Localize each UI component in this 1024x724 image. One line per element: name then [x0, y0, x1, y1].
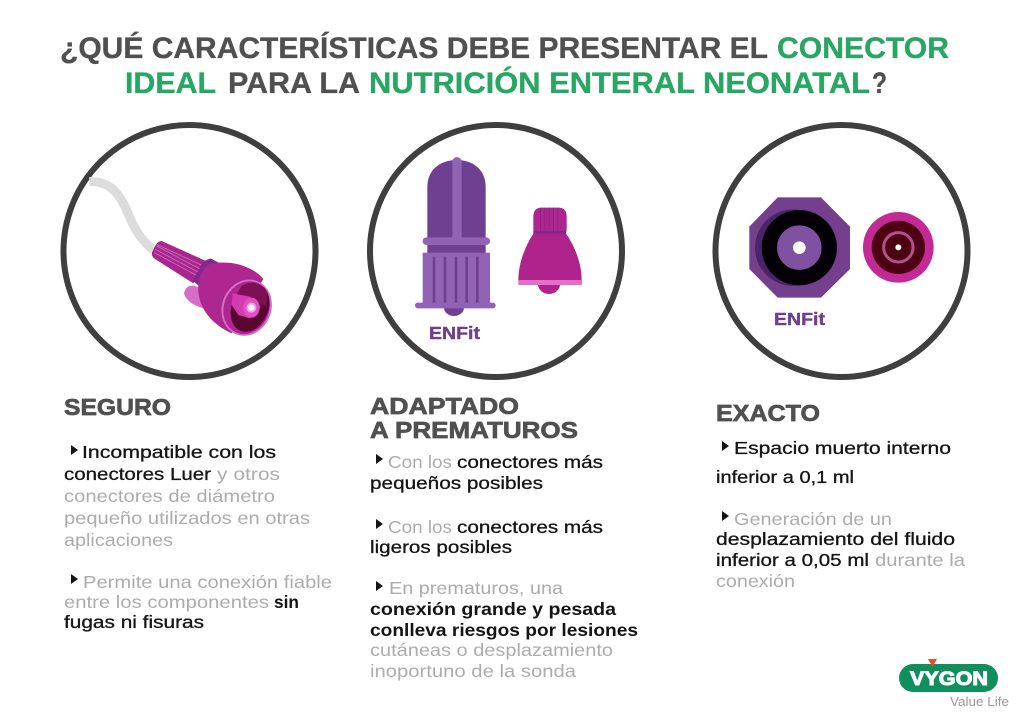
text block: incompatible: conectores Luer [64, 464, 211, 484]
text block: generación: inferior a 0,05 ml [716, 550, 869, 570]
title: ? [872, 67, 887, 100]
text block: conectores pequeños: conectores más [457, 452, 603, 472]
icon: connector in circle [64, 125, 316, 377]
text block: incompatible: y otros [217, 464, 280, 484]
icon: enfit and small connector front view: ENFit [774, 309, 825, 329]
text block: espacio muerto: Espacio muerto interno [734, 438, 951, 458]
heading: adaptado a prematuros: ADAPTADO [370, 393, 519, 419]
text block: generación [716, 509, 965, 591]
text block: permite: entre los componentes [64, 592, 269, 612]
icon: enfit and small connector side view: ENFit [429, 323, 480, 343]
text block: permite: Permite una conexión fiable [83, 572, 332, 592]
text block: conectores ligeros [370, 517, 603, 557]
heading: exacto: EXACTO [716, 400, 820, 426]
heading: adaptado a prematuros [370, 393, 578, 443]
title: ¿QUÉ CARACTERÍSTICAS DEBE PRESENTAR EL [60, 31, 768, 65]
text block: en prematuros: cutáneas o desplazamiento [370, 640, 613, 660]
text block: conectores pequeños: Con los [388, 452, 452, 472]
text block: espacio muerto: inferior a 0,1 ml [716, 467, 854, 487]
title: CONECTOR [777, 32, 949, 65]
text block: conectores ligeros: ligeros posibles [370, 537, 512, 557]
text block: conectores ligeros: Con los [388, 517, 452, 537]
text block: conectores pequeños [370, 452, 603, 493]
text block: en prematuros: En prematuros, una [389, 578, 563, 598]
text block: en prematuros: inoportuno de la sonda [370, 661, 576, 681]
text block: espacio muerto [716, 438, 951, 487]
title: PARA LA [228, 67, 360, 100]
icon: enfit and small connector front view [716, 125, 968, 377]
panel: exacto [716, 125, 968, 591]
panel: adaptado a prematuros [370, 125, 638, 681]
text block: permite: sin [274, 592, 299, 612]
text block: en prematuros: conexión grande y pesada [370, 599, 616, 619]
text block: incompatible: pequeño utilizados en otras [64, 508, 310, 528]
text block: en prematuros [370, 578, 638, 681]
text block: incompatible: conectores de diámetro [64, 486, 275, 506]
text block: generación: durante la [875, 550, 965, 570]
text block: conectores pequeños: pequeños posibles [370, 473, 543, 493]
text block: generación: desplazamiento del fluido [716, 529, 955, 549]
text block: conectores ligeros: conectores más [457, 517, 603, 537]
text block: generación: Generación de un [734, 509, 892, 529]
text block: generación: conexión [716, 571, 795, 591]
heading: seguro: SEGURO [64, 394, 171, 420]
heading: adaptado a prematuros: A PREMATUROS [370, 417, 578, 443]
title: IDEAL [125, 67, 216, 100]
text block: permite [64, 572, 332, 632]
text block: incompatible: aplicaciones [64, 530, 173, 550]
logo: vygon [899, 659, 1009, 709]
title [60, 31, 949, 100]
text block: incompatible [64, 442, 310, 550]
text block: en prematuros: conlleva riesgos por lesiones [370, 620, 638, 640]
text block: permite: fugas ni fisuras [64, 612, 204, 632]
logo: vygon: Value Life [950, 694, 1009, 709]
text block: incompatible: Incompatible con los [82, 442, 276, 462]
title: NUTRICIÓN ENTERAL NEONATAL [369, 66, 870, 100]
icon: enfit and small connector side view [370, 125, 622, 377]
logo: vygon: VYGON [910, 669, 988, 690]
panel: seguro [64, 125, 332, 632]
